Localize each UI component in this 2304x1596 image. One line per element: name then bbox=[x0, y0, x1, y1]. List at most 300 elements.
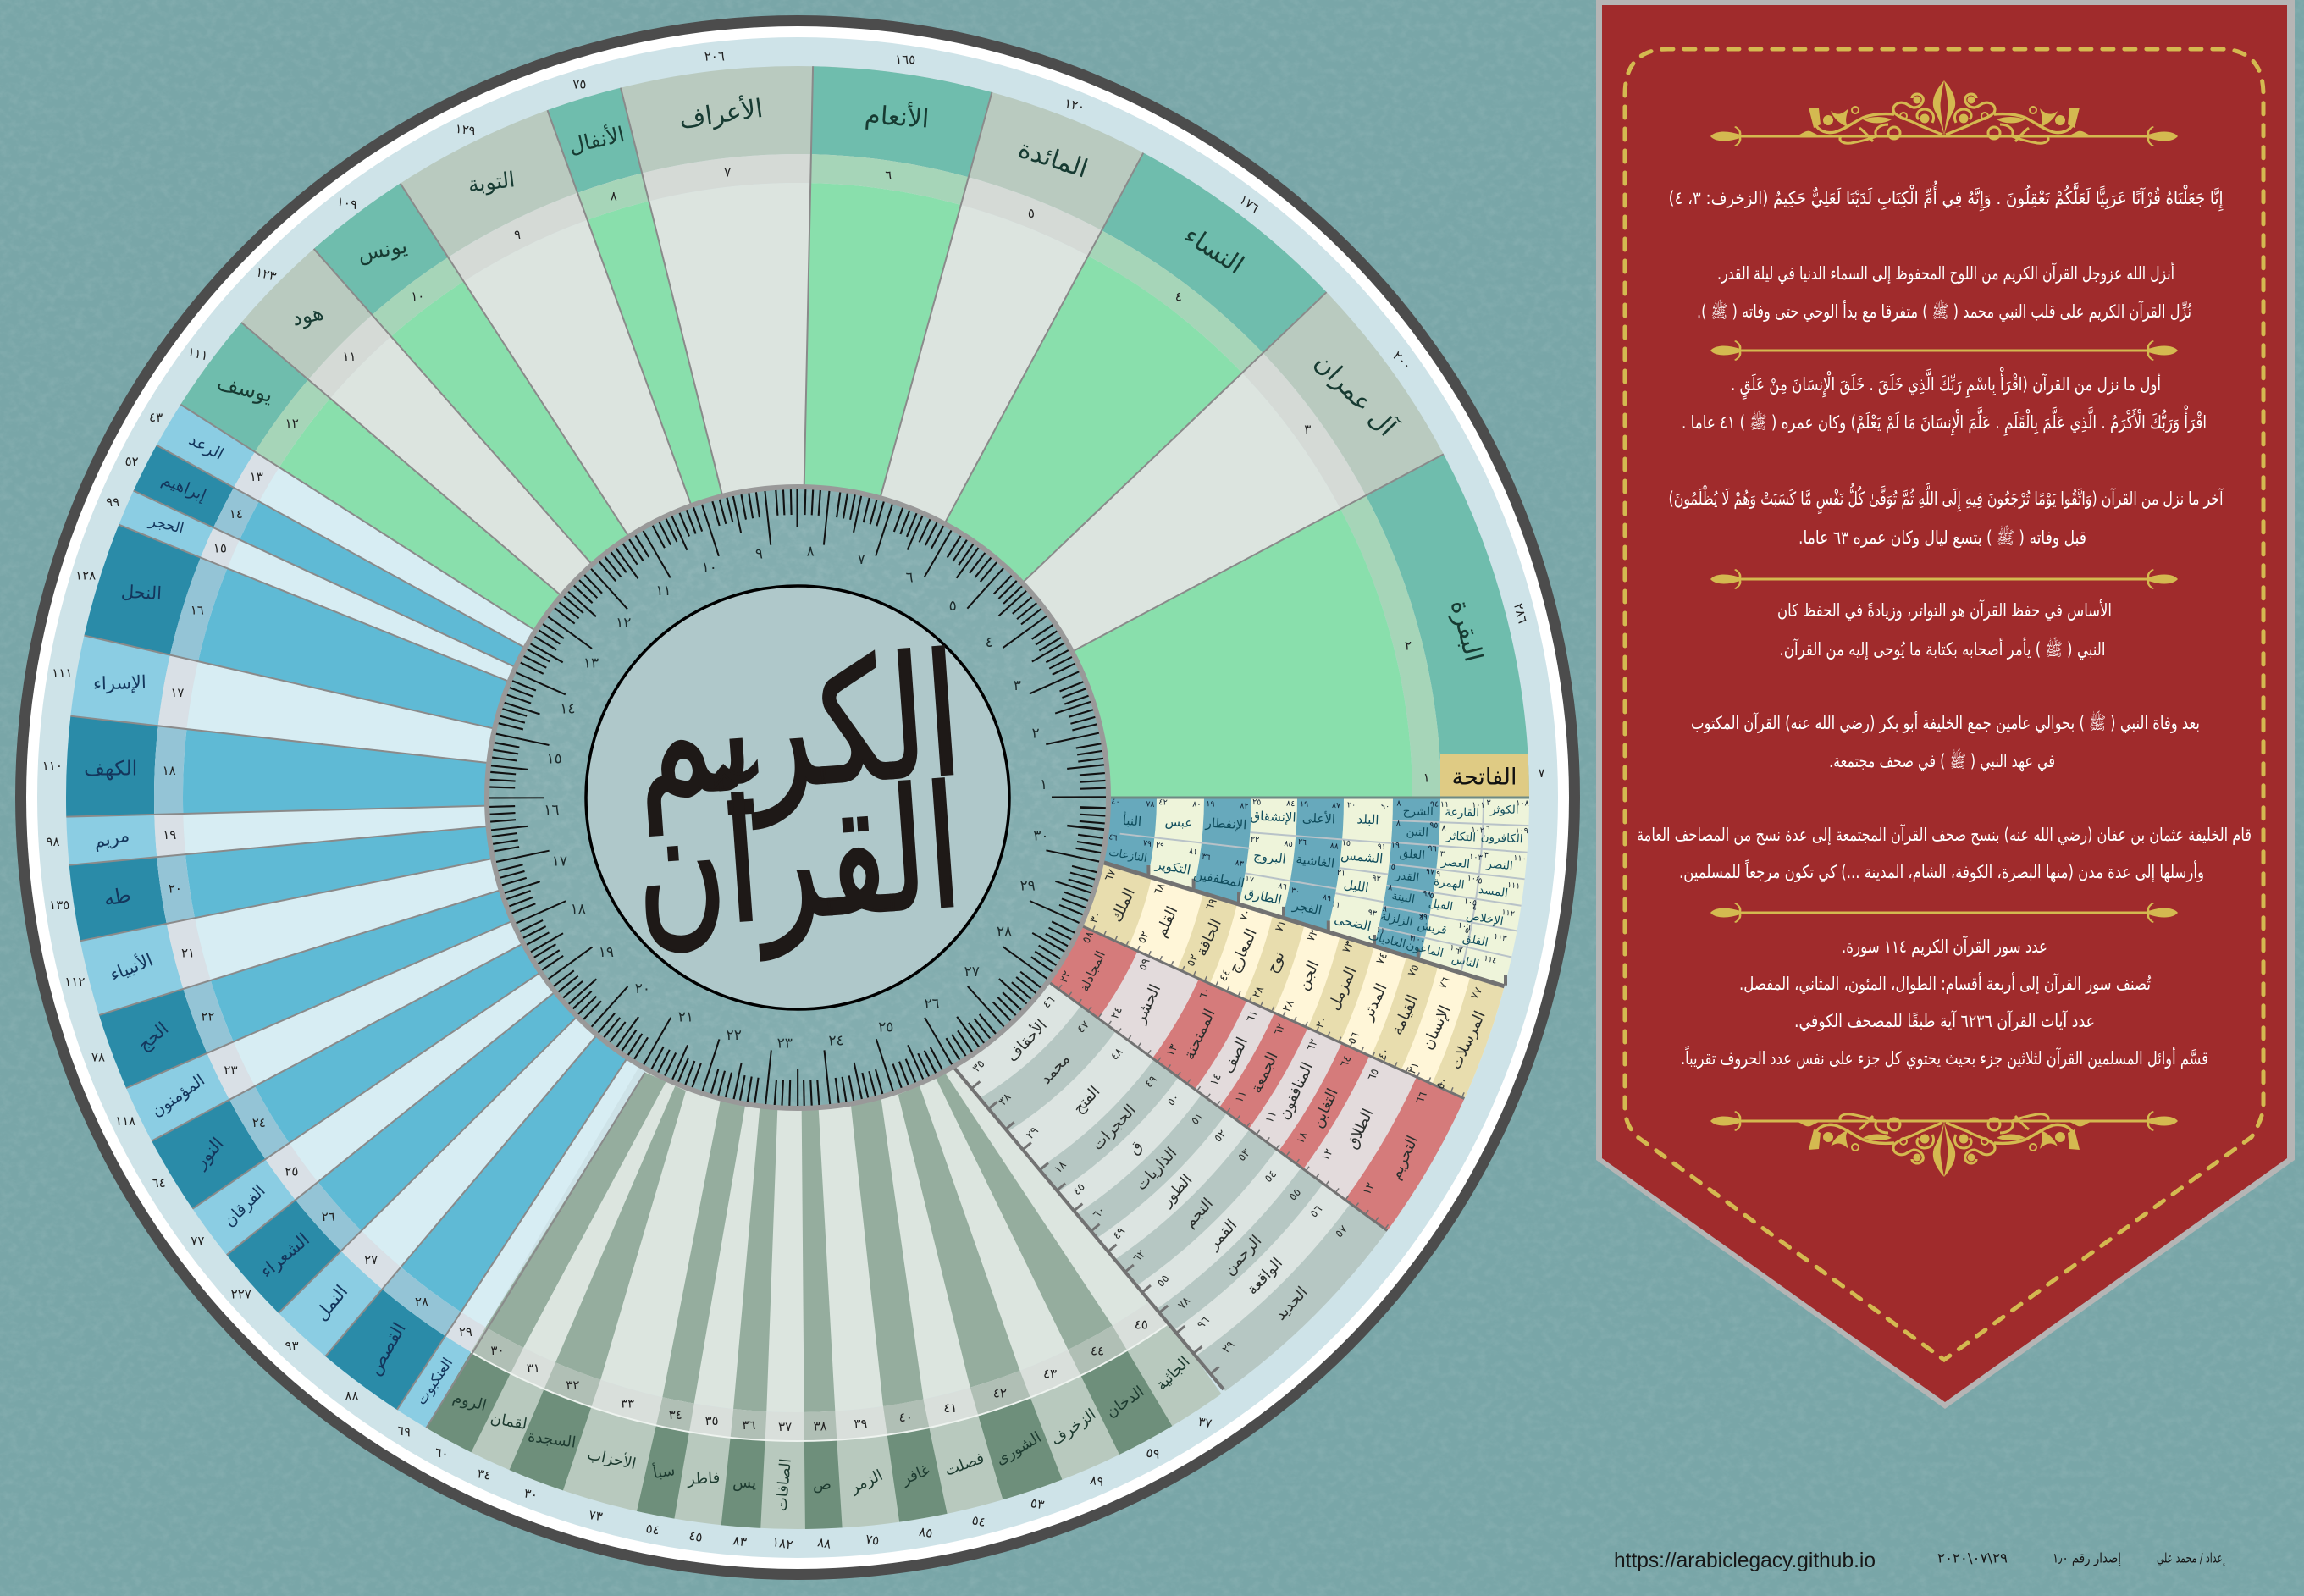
labels for surahs 58 to 66: الصف bbox=[1219, 1035, 1251, 1076]
labels for surahs 78 to 114: ١١٢ bbox=[1501, 908, 1515, 919]
arc bands for surahs 67 to 77 bbox=[1084, 865, 1505, 1099]
footer credits: إعداد / محمد علي bbox=[2157, 1549, 2225, 1566]
banner text: quranic verse and revelation: إِنَّا جَعَلْنَاهُ قُرْآنًا عَرَبِيًّا لَعَلَّكُمْ تَعْقِلُونَ . وَإِنَّهُ فِي أُمِّ الْكِتَابِ لَدَيْنَا لَعَلِيٌّ حَكِيمٌ (الزخرف: ٣، ٤) bbox=[1668, 180, 2224, 212]
surah names 13 to 29: طه bbox=[102, 883, 133, 911]
surah names 30 to 45 bbox=[450, 1353, 1194, 1512]
labels for surahs 78 to 114: ٨٩ bbox=[1322, 892, 1332, 903]
labels for surahs 78 to 114: ١١ bbox=[1375, 925, 1386, 936]
juz numbers 1 to 30 bbox=[544, 543, 1049, 1052]
labels for surahs 58 to 66: ١٣ bbox=[1164, 1042, 1180, 1058]
labels for surahs 46 to 57: ٥٥ bbox=[1286, 1186, 1304, 1203]
labels for surahs 46 to 57: ٤٩ bbox=[1111, 1225, 1128, 1242]
labels for surahs 78 to 114: ٣٠ bbox=[1290, 886, 1301, 897]
labels for surahs 58 to 66: ٦٠ bbox=[1196, 986, 1213, 1002]
labels for surahs 46 to 57: النجم bbox=[1181, 1195, 1217, 1231]
verse counts in the outer ring: ٨٨ bbox=[345, 1388, 359, 1403]
labels for surahs 58 to 66: الطلاق bbox=[1343, 1106, 1377, 1151]
surah names 1 to 12: آل عمران bbox=[1308, 347, 1403, 444]
labels for surahs 58 to 66: ١٢ bbox=[1361, 1181, 1378, 1197]
labels for surahs 78 to 114: ٩٨ bbox=[1422, 889, 1432, 899]
labels for surahs 78 to 114: الكافرون bbox=[1480, 831, 1523, 846]
surah index numbers 1 to 45: ٢٨ bbox=[415, 1295, 428, 1310]
verse counts in the outer ring: ١٢٠ bbox=[1064, 96, 1086, 114]
surah names 1 to 12: الأنفال bbox=[566, 120, 627, 158]
labels for surahs 78 to 114: ٣ bbox=[1439, 849, 1445, 859]
labels for surahs 67 to 77: ٧٠ bbox=[1237, 907, 1254, 923]
juz numbers 1 to 30: ١٤ bbox=[560, 701, 575, 718]
surah names 30 to 45: الدخان bbox=[1102, 1383, 1147, 1422]
labels for surahs 78 to 114: ٨ bbox=[1382, 904, 1388, 914]
juz numbers 1 to 30: ٢٩ bbox=[1020, 877, 1036, 894]
surah index numbers 1 to 45: ٥ bbox=[1028, 206, 1035, 221]
verse counts in the outer ring: ٥٩ bbox=[1145, 1444, 1161, 1462]
surah names 1 to 12: الأعراف bbox=[677, 91, 765, 135]
verse counts in the outer ring bbox=[42, 48, 1545, 1553]
footer credits bbox=[1614, 1549, 2225, 1572]
surah index numbers 1 to 45: ٣٩ bbox=[854, 1416, 868, 1431]
surah names 30 to 45: فاطر bbox=[686, 1469, 721, 1488]
labels for surahs 78 to 114: العاديات bbox=[1367, 929, 1407, 951]
verse counts in the outer ring: ١١٠ bbox=[42, 758, 63, 773]
labels for surahs 67 to 77: ٣٠ bbox=[1088, 909, 1104, 925]
central calligraphy medallion bbox=[586, 586, 1009, 1009]
labels for surahs 58 to 66: ٥٨ bbox=[1080, 930, 1097, 946]
verse counts in the outer ring: ١١١ bbox=[186, 344, 210, 364]
surah index numbers 1 to 45: ٤٢ bbox=[993, 1386, 1007, 1401]
surah index numbers 1 to 45: ١ bbox=[1423, 770, 1430, 786]
labels for surahs 58 to 66: ٦١ bbox=[1244, 1008, 1261, 1024]
labels for surahs 78 to 114: التين bbox=[1406, 825, 1428, 840]
labels for surahs 78 to 114: القارعة bbox=[1445, 805, 1479, 820]
labels for surahs 67 to 77: ٧٥ bbox=[1406, 963, 1423, 979]
red banner panel bbox=[1596, 0, 2295, 1409]
labels for surahs 78 to 114: الهمزة bbox=[1433, 875, 1465, 892]
labels for surahs 78 to 114: النصر bbox=[1485, 857, 1513, 873]
verse counts in the outer ring: ٦٠ bbox=[434, 1444, 450, 1462]
juz numbers 1 to 30: ٣٠ bbox=[1033, 828, 1049, 845]
verse counts in the outer ring: ١٦٥ bbox=[895, 52, 915, 67]
surah index numbers 1 to 45: ١٩ bbox=[163, 827, 176, 842]
labels for surahs 78 to 114: ١٩ bbox=[1390, 840, 1400, 850]
surah index numbers 1 to 45: ٢٢ bbox=[201, 1008, 214, 1024]
labels for surahs 46 to 57: ٣٥ bbox=[970, 1058, 987, 1075]
labels for surahs 67 to 77: ٥٠ bbox=[1434, 1075, 1450, 1091]
labels for surahs 78 to 114: ٨ bbox=[1396, 799, 1401, 809]
verse counts in the outer ring: ٣٤ bbox=[476, 1466, 492, 1483]
labels for surahs 78 to 114: الشرح bbox=[1403, 804, 1434, 819]
labels for surahs 78 to 114 bbox=[1105, 797, 1529, 975]
surah index numbers 1 to 45: ٨ bbox=[611, 188, 617, 203]
labels for surahs 58 to 66: ١١ bbox=[1233, 1089, 1250, 1105]
surah index numbers 1 to 45: ٢١ bbox=[181, 946, 195, 961]
surah index numbers 1 to 45: ٩ bbox=[514, 227, 521, 242]
labels for surahs 46 to 57: ق bbox=[1125, 1137, 1146, 1158]
labels for surahs 58 to 66: ٦٣ bbox=[1304, 1037, 1321, 1053]
labels for surahs 67 to 77: المدثر bbox=[1358, 980, 1391, 1024]
surah names 30 to 45: الشورى bbox=[992, 1428, 1045, 1469]
labels for surahs 67 to 77: ٣١ bbox=[1406, 1060, 1423, 1076]
banner text: quran facts: عدد آيات القرآن ٦٢٣٦ آية طبقًا للمصحف الكوفي. bbox=[1794, 1010, 2095, 1031]
juz numbers 1 to 30: ١ bbox=[1040, 776, 1047, 793]
verse counts in the outer ring: ٧٨ bbox=[91, 1049, 105, 1064]
labels for surahs 67 to 77: الملك bbox=[1108, 886, 1139, 925]
labels for surahs 46 to 57: محمد bbox=[1037, 1050, 1074, 1088]
footer credits: https://arabiclegacy.github.io bbox=[1614, 1549, 1876, 1572]
labels for surahs 46 to 57: ٥٣ bbox=[1235, 1146, 1253, 1164]
banner text: first revelation: أول ما نزل من القرآن (اقْرَأْ بِاسْمِ رَبِّكَ الَّذِي خَلَقَ . خَلَقَ الْإِنسَانَ مِنْ عَلَقٍ . bbox=[1731, 367, 2161, 400]
surah names 1 to 12: الفاتحة bbox=[1451, 764, 1517, 791]
surah names 30 to 45: سبأ bbox=[651, 1459, 677, 1483]
labels for surahs 67 to 77: نوح bbox=[1263, 948, 1288, 976]
labels for surahs 78 to 114: ١٠٤ bbox=[1467, 874, 1481, 884]
labels for surahs 78 to 114: ١١٣ bbox=[1493, 932, 1507, 944]
surah names 30 to 45: الجاثية bbox=[1152, 1353, 1194, 1394]
labels for surahs 78 to 114: ٢٦ bbox=[1297, 837, 1307, 848]
labels for surahs 67 to 77: ٧٦ bbox=[1436, 975, 1453, 991]
labels for surahs 78 to 114: ٥ bbox=[1478, 876, 1483, 886]
juz numbers 1 to 30: ٨ bbox=[807, 543, 815, 560]
juz numbers 1 to 30: ٢٠ bbox=[635, 980, 650, 997]
labels for surahs 78 to 114: البروج bbox=[1252, 848, 1287, 868]
labels for surahs 78 to 114: ١٩ bbox=[1300, 799, 1308, 809]
verse counts in the outer ring: ١٢٨ bbox=[75, 567, 96, 583]
labels for surahs 78 to 114: الناس bbox=[1450, 952, 1480, 971]
juz numbers 1 to 30: ١٨ bbox=[571, 901, 586, 918]
labels for surahs 78 to 114: ١١٤ bbox=[1483, 953, 1498, 966]
labels for surahs 78 to 114: القدر bbox=[1394, 869, 1420, 885]
labels for surahs 67 to 77: الحاقة bbox=[1192, 916, 1225, 959]
labels for surahs 78 to 114: ٨٨ bbox=[1329, 842, 1339, 852]
labels for surahs 46 to 57: ٤٦ bbox=[1041, 994, 1058, 1011]
labels for surahs 67 to 77: ٧١ bbox=[1273, 918, 1290, 935]
labels for surahs 58 to 66: ٦٤ bbox=[1338, 1053, 1355, 1069]
labels for surahs 58 to 66: ١٤ bbox=[1207, 1072, 1224, 1088]
labels for surahs 78 to 114: ٣ bbox=[1484, 851, 1489, 860]
labels for surahs 67 to 77: ٢٨ bbox=[1280, 998, 1297, 1014]
labels for surahs 78 to 114: ١٠٨ bbox=[1516, 798, 1529, 809]
surah names 13 to 29: الحجر bbox=[146, 512, 185, 538]
juz numbers 1 to 30: ٩ bbox=[755, 546, 763, 563]
labels for surahs 46 to 57: ٥٥ bbox=[1155, 1273, 1172, 1290]
verse counts in the outer ring: ٢٢٧ bbox=[231, 1287, 251, 1302]
surah names 1 to 12: النساء bbox=[1179, 220, 1249, 280]
labels for surahs 78 to 114: ٦ bbox=[1454, 947, 1461, 957]
labels for surahs 78 to 114: ٨٠ bbox=[1192, 800, 1202, 809]
surah index numbers 1 to 45: ٣٤ bbox=[669, 1407, 682, 1422]
juz numbers 1 to 30: ٥ bbox=[949, 598, 957, 615]
verse counts in the outer ring: ٥٤ bbox=[970, 1512, 986, 1530]
surah names 1 to 12: هود bbox=[290, 300, 326, 331]
central calligraphy medallion: الكريم bbox=[628, 618, 967, 837]
labels for surahs 78 to 114: ٤٦ bbox=[1108, 832, 1118, 843]
labels for surahs 78 to 114: الإنشقاق bbox=[1250, 808, 1296, 826]
separator lines between surahs bbox=[66, 66, 1444, 1428]
labels for surahs 78 to 114: ٩٤ bbox=[1430, 799, 1439, 809]
verse counts in the outer ring: ٨٩ bbox=[1089, 1472, 1105, 1489]
verse counts in the outer ring: ٨٨ bbox=[816, 1534, 832, 1552]
labels for surahs 58 to 66: المجادلة bbox=[1076, 948, 1108, 994]
labels for surahs 67 to 77: القلم bbox=[1152, 903, 1181, 940]
labels for surahs 46 to 57: ٥٤ bbox=[1263, 1168, 1279, 1185]
labels for surahs 78 to 114: ١١١ bbox=[1506, 881, 1521, 892]
verse counts in the outer ring: ٥٣ bbox=[1030, 1495, 1046, 1512]
labels for surahs 78 to 114: الكوثر bbox=[1489, 803, 1519, 817]
juz numbers 1 to 30: ١٠ bbox=[702, 559, 717, 576]
surah names 1 to 12: التوبة bbox=[467, 167, 517, 197]
surah index numbers 1 to 45: ٢ bbox=[1405, 638, 1412, 653]
labels for surahs 46 to 57: الرحمن bbox=[1220, 1232, 1265, 1278]
surah names 30 to 45: الزخرف bbox=[1047, 1405, 1099, 1450]
surah index numbers 1 to 45: ٢٩ bbox=[459, 1324, 472, 1339]
surah names 1 to 12: يوسف bbox=[214, 370, 275, 407]
verse counts in the outer ring: ٧٣ bbox=[588, 1507, 604, 1524]
central calligraphy medallion: القرآن bbox=[628, 748, 967, 969]
surah names 13 to 29: النور bbox=[190, 1134, 228, 1173]
verse counts in the outer ring: ١١٨ bbox=[115, 1113, 135, 1129]
labels for surahs 46 to 57: ٥٦ bbox=[1307, 1203, 1325, 1220]
labels for surahs 78 to 114: التكاثر bbox=[1445, 829, 1476, 845]
verse counts in the outer ring: ٧٥ bbox=[865, 1531, 881, 1549]
juz numbers 1 to 30: ١٣ bbox=[583, 655, 599, 672]
labels for surahs 67 to 77: ٢٠ bbox=[1314, 1014, 1330, 1030]
labels for surahs 67 to 77: القيامة bbox=[1388, 992, 1422, 1038]
labels for surahs 78 to 114: ٨ bbox=[1396, 819, 1401, 828]
surah index numbers 1 to 45: ١٦ bbox=[191, 602, 204, 617]
verse counts in the outer ring: ١٢٣ bbox=[254, 264, 278, 284]
verse counts in the outer ring: ٩٨ bbox=[46, 834, 60, 849]
juz numbers 1 to 30: ١١ bbox=[655, 583, 671, 599]
surah names 30 to 45: فصلت bbox=[942, 1450, 986, 1480]
labels for surahs 78 to 114: ٢٠ bbox=[1347, 800, 1356, 810]
surah names 13 to 29: الأنبياء bbox=[107, 949, 156, 986]
labels for surahs 46 to 57: الأحقاف bbox=[1003, 1016, 1051, 1065]
labels for surahs 67 to 77: الإنسان bbox=[1418, 1002, 1455, 1052]
labels for surahs 78 to 114: ٢٥ bbox=[1252, 798, 1262, 807]
verse counts in the outer ring: ١١١ bbox=[52, 665, 72, 681]
surah index numbers 1 to 45: ٤٠ bbox=[899, 1410, 913, 1425]
labels for surahs 67 to 77: ٢٨ bbox=[1251, 984, 1267, 1001]
surah names 13 to 29: المؤمنون bbox=[148, 1071, 208, 1121]
labels for surahs 78 to 114: المطففين bbox=[1192, 866, 1246, 891]
labels for surahs 67 to 77: ٧٧ bbox=[1468, 986, 1485, 1002]
labels for surahs 78 to 114: ٨٦ bbox=[1277, 881, 1288, 892]
labels for surahs 78 to 114: ٤ bbox=[1418, 913, 1424, 923]
labels for surahs 78 to 114: ١٠٧ bbox=[1449, 943, 1463, 955]
labels for surahs 46 to 57: ٢٩ bbox=[1024, 1124, 1041, 1142]
banner text: preservation and compilation: النبي ( ﷺ ) يأمر أصحابه بكتابة ما يُوحى إليه من القرآن. bbox=[1780, 636, 2105, 660]
surah names 13 to 29 bbox=[84, 430, 456, 1408]
labels for surahs 78 to 114: ٩١ bbox=[1377, 842, 1386, 852]
surah index numbers 1 to 45: ٢٧ bbox=[364, 1252, 378, 1267]
juz numbers 1 to 30: ٢٦ bbox=[924, 996, 940, 1013]
juz numbers 1 to 30: ٢ bbox=[1032, 726, 1040, 743]
labels for surahs 67 to 77: ٥٢ bbox=[1135, 930, 1152, 946]
number band for surahs 30 to 45 bbox=[154, 154, 1441, 1441]
labels for surahs 78 to 114: ٥ bbox=[1429, 891, 1435, 901]
surah names 13 to 29: مريم bbox=[91, 825, 131, 853]
labels for surahs 78 to 114: ٧٩ bbox=[1142, 838, 1152, 849]
labels for surahs 78 to 114: ٨٣ bbox=[1235, 859, 1245, 869]
labels for surahs 78 to 114: ٤ bbox=[1472, 903, 1478, 913]
labels for surahs 78 to 114: ٥ bbox=[1464, 925, 1470, 936]
labels for surahs 58 to 66: ٦٢ bbox=[1272, 1022, 1288, 1038]
labels for surahs 46 to 57: ٤٥ bbox=[1070, 1181, 1088, 1198]
surah names 30 to 45: الصافات bbox=[773, 1458, 795, 1512]
labels for surahs 78 to 114: ١٠٩ bbox=[1515, 826, 1528, 836]
surah names 1 to 12: الأنعام bbox=[864, 97, 931, 135]
labels for surahs 78 to 114: ٩٧ bbox=[1425, 867, 1435, 877]
labels for surahs 78 to 114: ١٠١ bbox=[1472, 801, 1485, 810]
labels for surahs 78 to 114: ٩٣ bbox=[1367, 908, 1378, 919]
labels for surahs 46 to 57: الفتح bbox=[1069, 1083, 1103, 1118]
labels for surahs 78 to 114: الفيل bbox=[1428, 897, 1454, 914]
labels for surahs 67 to 77: ٤٤ bbox=[1217, 968, 1234, 984]
verse counts in the outer ring: ٨٣ bbox=[732, 1532, 748, 1550]
labels for surahs 78 to 114: الماعون bbox=[1405, 938, 1445, 960]
labels for surahs 78 to 114: ٨ bbox=[1441, 824, 1446, 833]
labels for surahs 67 to 77: الجن bbox=[1294, 958, 1323, 993]
labels for surahs 78 to 114: العلق bbox=[1399, 847, 1426, 863]
verse counts in the outer ring: ١٧٦ bbox=[1236, 191, 1262, 216]
labels for surahs 58 to 66: ٦٦ bbox=[1413, 1090, 1430, 1106]
labels for surahs 78 to 114: النازعات bbox=[1108, 846, 1148, 865]
labels for surahs 58 to 66: ١٨ bbox=[1294, 1130, 1311, 1146]
verse counts in the outer ring: ٧٧ bbox=[191, 1233, 204, 1248]
juz numbers 1 to 30: ٢٥ bbox=[878, 1019, 893, 1036]
surah index numbers 1 to 45: ١٨ bbox=[163, 763, 176, 778]
labels for surahs 67 to 77: ٦٩ bbox=[1203, 897, 1220, 913]
labels for surahs 78 to 114: ١٩ bbox=[1206, 799, 1215, 809]
surah index numbers 1 to 45: ٤٥ bbox=[1135, 1317, 1148, 1332]
arc bands for surahs 58 to 66 bbox=[92, 92, 1503, 1503]
labels for surahs 46 to 57: ٤٧ bbox=[1075, 1019, 1092, 1036]
labels for surahs 67 to 77: ٧٤ bbox=[1373, 951, 1390, 967]
divider 2 bbox=[1710, 569, 2178, 589]
labels for surahs 67 to 77: ٤٠ bbox=[1376, 1046, 1393, 1062]
juz numbers 1 to 30: ٢٧ bbox=[964, 964, 980, 980]
Al-Fatiha block bbox=[1440, 754, 1529, 798]
labels for surahs 46 to 57: ٣٨ bbox=[997, 1091, 1014, 1108]
juz numbers 1 to 30: ٧ bbox=[858, 551, 865, 568]
labels for surahs 58 to 66: ٥٩ bbox=[1136, 957, 1153, 973]
surah names 1 to 12: يونس bbox=[356, 233, 409, 266]
juz numbers 1 to 30: ٢٢ bbox=[727, 1027, 742, 1044]
labels for surahs 78 to 114: ٩٩ bbox=[1418, 912, 1428, 923]
labels for surahs 78 to 114: البينة bbox=[1390, 889, 1416, 907]
verse counts in the outer ring: ١٣٥ bbox=[49, 897, 69, 913]
surah index numbers 1 to 45: ٣٢ bbox=[566, 1378, 579, 1393]
surah index numbers 1 to 45: ٢٠ bbox=[169, 881, 182, 896]
labels for surahs 78 to 114: الطارق bbox=[1243, 885, 1283, 908]
labels for surahs 67 to 77 bbox=[1088, 868, 1489, 1091]
surah names 30 to 45: الروم bbox=[450, 1389, 489, 1415]
juz numbers 1 to 30: ١٥ bbox=[546, 750, 562, 767]
verse counts in the outer ring: ٣٠ bbox=[522, 1486, 539, 1503]
juz numbers 1 to 30: ٣ bbox=[1014, 677, 1021, 694]
labels for surahs 78 to 114: الشمس bbox=[1340, 847, 1384, 867]
surah names 13 to 29: إبراهيم bbox=[158, 471, 209, 505]
surah index numbers 1 to 45: ٢٣ bbox=[224, 1063, 238, 1078]
surah names 30 to 45: السجدة bbox=[527, 1428, 577, 1452]
bottom ornament bbox=[1710, 1111, 2178, 1177]
labels for surahs 78 to 114: ٨٢ bbox=[1240, 801, 1249, 811]
labels for surahs 58 to 66: ١١ bbox=[1263, 1109, 1279, 1125]
central hub with juz scale bbox=[480, 480, 1115, 1115]
surah names 30 to 45: الأحزاب bbox=[586, 1444, 638, 1473]
labels for surahs 78 to 114: ٣ bbox=[1486, 798, 1491, 808]
verse counts in the outer ring: ٩٣ bbox=[285, 1338, 299, 1353]
verse counts in the outer ring: ٧ bbox=[1538, 765, 1545, 781]
banner text: preservation and compilation: الأساس في حفظ القرآن هو التواتر، وزيادةً في الحفظ كان bbox=[1777, 599, 2112, 621]
surah index numbers 1 to 45: ١٣ bbox=[250, 469, 263, 484]
labels for surahs 46 to 57 bbox=[970, 994, 1351, 1356]
surah names 30 to 45: ص bbox=[813, 1476, 832, 1494]
labels for surahs 58 to 66: ٦٥ bbox=[1366, 1067, 1382, 1083]
surah index numbers 1 to 45: ٤٣ bbox=[1043, 1367, 1057, 1382]
labels for surahs 46 to 57: ٥١ bbox=[1189, 1111, 1207, 1128]
labels for surahs 46 to 57: ٦٢ bbox=[1131, 1248, 1148, 1265]
surah index numbers 1 to 45: ٧ bbox=[724, 165, 731, 180]
surah index numbers 1 to 45: ١٤ bbox=[229, 506, 243, 522]
divider 3 bbox=[1710, 903, 2178, 923]
labels for surahs 78 to 114: العصر bbox=[1440, 855, 1471, 871]
labels for surahs 67 to 77: المعارج bbox=[1224, 925, 1261, 976]
labels for surahs 78 to 114: ٨٤ bbox=[1286, 799, 1295, 809]
verse counts in the outer ring: ١٨٢ bbox=[771, 1534, 794, 1553]
banner text: preservation and compilation bbox=[1637, 599, 2252, 883]
labels for surahs 78 to 114: الليل bbox=[1343, 876, 1370, 896]
banner text: preservation and compilation: في عهد النبي ( ﷺ ) في صحف مجتمعة. bbox=[1829, 748, 2055, 771]
labels for surahs 46 to 57: ٤٩ bbox=[1142, 1074, 1160, 1091]
surah index numbers 1 to 45: ١٢ bbox=[285, 416, 299, 431]
labels for surahs 46 to 57: القمر bbox=[1204, 1216, 1240, 1254]
verse counts in the outer ring: ٣٧ bbox=[1197, 1414, 1213, 1431]
labels for surahs 78 to 114: ١١ bbox=[1330, 899, 1341, 910]
surah index numbers 1 to 45: ٣٦ bbox=[742, 1417, 755, 1433]
labels for surahs 67 to 77: ٧٢ bbox=[1305, 927, 1321, 944]
surah index numbers 1 to 45: ٤٤ bbox=[1091, 1343, 1104, 1358]
surah index numbers 1 to 45: ١٥ bbox=[213, 541, 227, 556]
verse counts in the outer ring: ٤٣ bbox=[149, 410, 163, 425]
surah names 30 to 45: الزمر bbox=[847, 1466, 886, 1497]
labels for surahs 58 to 66: الممتحنة bbox=[1180, 1006, 1219, 1063]
labels for surahs 78 to 114: الإنفطار bbox=[1204, 815, 1247, 832]
labels for surahs 67 to 77: المرسلات bbox=[1447, 1008, 1489, 1072]
surah index numbers 1 to 45: ٣٠ bbox=[490, 1343, 505, 1358]
surah index numbers 1 to 45: ٦ bbox=[885, 168, 892, 183]
verse counts in the outer ring: ١١٢ bbox=[64, 975, 85, 990]
labels for surahs 46 to 57: ٧٨ bbox=[1175, 1295, 1193, 1312]
juz numbers 1 to 30: ٢٤ bbox=[828, 1032, 844, 1049]
labels for surahs 78 to 114: ٤٠ bbox=[1111, 797, 1120, 807]
verse counts in the outer ring: ٢٠٠ bbox=[1390, 348, 1415, 373]
labels for surahs 78 to 114: الزلزلة bbox=[1379, 909, 1414, 930]
verse counts in the outer ring: ٤٥ bbox=[688, 1527, 704, 1545]
labels for surahs 78 to 114: المسد bbox=[1478, 883, 1509, 900]
surah names 30 to 45: لقمان bbox=[489, 1410, 528, 1433]
surah index numbers 1 to 45: ٣ bbox=[1304, 422, 1311, 437]
labels for surahs 78 to 114: ٥ bbox=[1390, 862, 1396, 872]
labels for surahs 46 to 57: ٥٠ bbox=[1165, 1091, 1182, 1108]
labels for surahs 46 to 57: الذاريات bbox=[1132, 1144, 1180, 1194]
footer credits: ٢٠٢٠\٠٧\٢٩ bbox=[1937, 1549, 2008, 1566]
labels for surahs 78 to 114: ١٠٠ bbox=[1411, 934, 1426, 946]
divider 1 bbox=[1710, 340, 2178, 361]
surah names 13 to 29: الكهف bbox=[84, 756, 137, 780]
labels for surahs 58 to 66: المنافقون bbox=[1275, 1060, 1317, 1123]
verse counts in the outer ring: ٦٩ bbox=[396, 1422, 412, 1440]
labels for surahs 78 to 114: النبأ bbox=[1122, 811, 1142, 829]
